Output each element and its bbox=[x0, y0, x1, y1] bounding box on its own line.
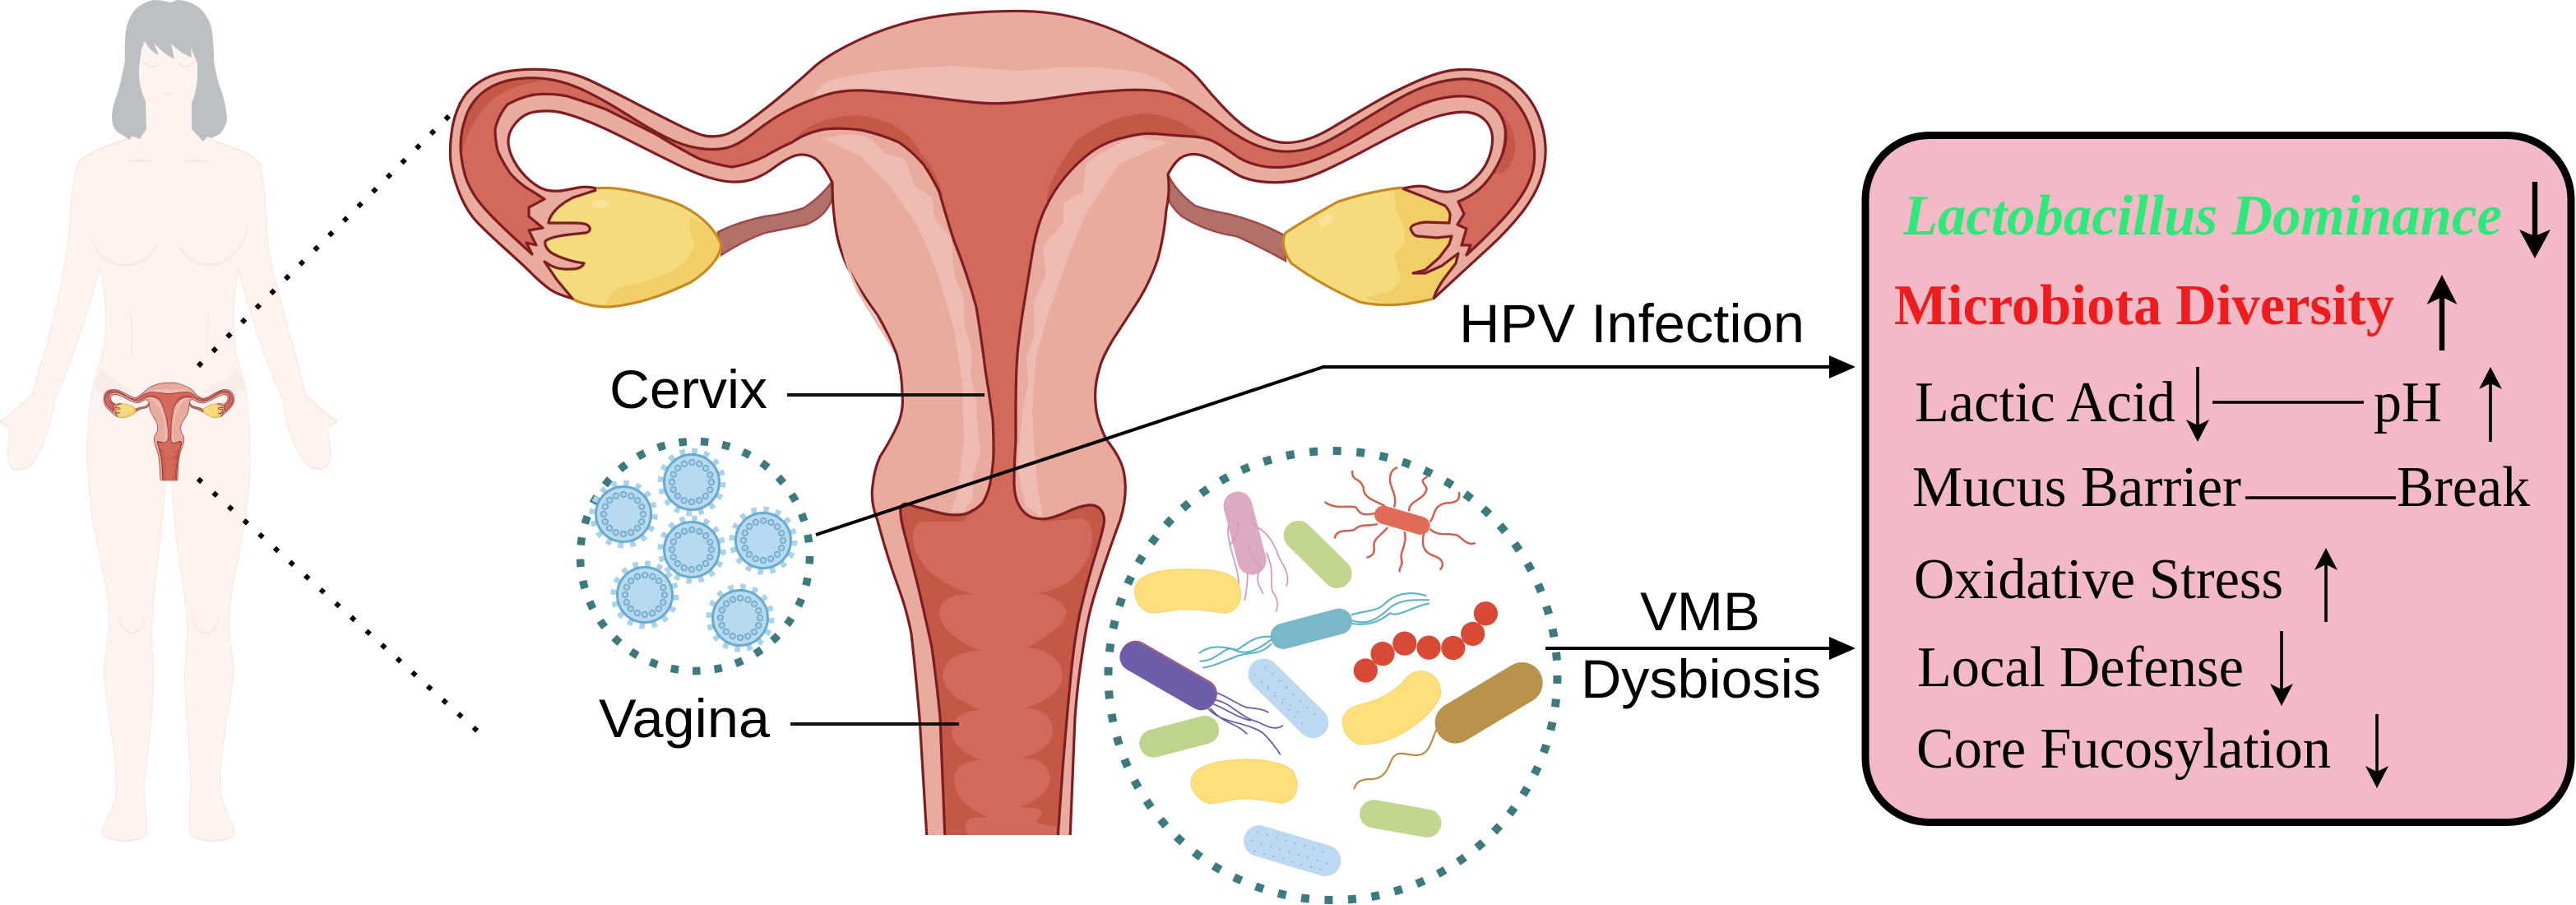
left outer wall highlight bbox=[841, 247, 895, 354]
label: VMB Dysbiosis: VMB bbox=[1640, 581, 1760, 642]
right ligament bbox=[1168, 174, 1286, 261]
teal flagellated rod bbox=[1200, 593, 1429, 667]
yellow bean 2 bbox=[1191, 759, 1297, 804]
Core Fucosylation: Core Fucosylation bbox=[1916, 717, 2331, 781]
bacteria circle bbox=[1109, 451, 1558, 900]
arrow down bbox=[2186, 367, 2209, 442]
body silhouette bbox=[0, 104, 336, 841]
Lactic Acid: Lactic Acid bbox=[1915, 371, 2175, 434]
cavity and fallopian tube lumen fill bbox=[105, 79, 1533, 494]
eyes and mouth bbox=[144, 63, 194, 94]
right tube shading bbox=[1494, 115, 1515, 174]
uterus outer wall bbox=[450, 11, 1545, 839]
pelvic shading bbox=[95, 368, 245, 392]
arrow down bbox=[2270, 631, 2293, 706]
pH: pH bbox=[2374, 371, 2442, 434]
right dark cavity shading bbox=[1047, 114, 1201, 202]
Lactobacillus Dominance: Lactobacillus Dominance bbox=[1902, 184, 2502, 248]
arrow up thick bbox=[2426, 275, 2458, 350]
Oxidative Stress: Oxidative Stress bbox=[1914, 548, 2283, 611]
yellow banana bbox=[1342, 671, 1441, 745]
panel: vaginal microenvironment changes bbox=[1865, 135, 2571, 823]
arrow down thick bbox=[2519, 182, 2551, 258]
yellow bean 1 bbox=[1135, 569, 1240, 613]
blue rod 1 bbox=[1255, 667, 1319, 726]
Microbiota Diversity: Microbiota Diversity bbox=[1894, 274, 2394, 337]
dotted zoom line upper bbox=[198, 87, 478, 366]
left ovary bbox=[544, 188, 721, 307]
right ovary bbox=[1283, 188, 1458, 305]
red cocci chain bbox=[1354, 601, 1498, 683]
left ligament bbox=[718, 183, 833, 255]
pointer: vagina bbox=[790, 722, 959, 726]
arrow: HPV to panel bbox=[816, 355, 1856, 535]
flagellated red bacterium bbox=[1325, 468, 1475, 571]
left wall highlight bbox=[822, 134, 980, 512]
HPV virus circle bbox=[581, 441, 809, 671]
brown rod with flagellum bbox=[1354, 683, 1522, 789]
arrow up bbox=[2479, 367, 2502, 442]
green rod 2 bbox=[1153, 730, 1205, 744]
Break: Break bbox=[2397, 456, 2530, 519]
pink rod with flagella bbox=[1228, 506, 1288, 611]
right wall highlight bbox=[1017, 136, 1168, 518]
pointer: cervix bbox=[787, 393, 985, 397]
body contour lines bbox=[92, 161, 247, 633]
hair bbox=[112, 0, 227, 142]
Mucus Barrier: Mucus Barrier bbox=[1912, 456, 2241, 519]
small uterus on body bbox=[104, 383, 234, 482]
label: HPV Infection: HPV Infection bbox=[1459, 293, 1805, 354]
dashed ring bbox=[1109, 451, 1558, 900]
vaginal canal dark wall and rugae bbox=[888, 494, 1119, 847]
label: VMB Dysbiosis bbox=[1581, 581, 1821, 709]
panel box bbox=[1865, 135, 2571, 823]
Local Defense: Local Defense bbox=[1917, 636, 2244, 699]
face and neck bbox=[138, 41, 203, 142]
arrow: VMB to panel bbox=[1545, 637, 1856, 660]
label: Vagina: Vagina bbox=[599, 688, 770, 749]
green rod top bbox=[1299, 536, 1337, 573]
connector line bbox=[2212, 401, 2364, 404]
connector line bbox=[2245, 496, 2396, 499]
arrow down bbox=[2365, 714, 2388, 788]
woman body figure bbox=[0, 0, 336, 841]
light band above cavity bbox=[814, 66, 1179, 107]
dotted zoom line lower bbox=[198, 479, 478, 731]
label: Cervix: Cervix bbox=[609, 359, 767, 420]
arrow up bbox=[2314, 548, 2337, 622]
uterus anatomy bbox=[450, 11, 1545, 847]
left tube shading bbox=[461, 80, 543, 156]
purple flagellated rod bbox=[1134, 655, 1282, 754]
blue rod 2 bbox=[1252, 832, 1332, 870]
left dark cavity shading bbox=[792, 115, 943, 197]
green rod 3 bbox=[1374, 814, 1427, 824]
label: VMB Dysbiosis: Dysbiosis bbox=[1581, 648, 1821, 709]
lumen outline bbox=[461, 78, 1535, 839]
